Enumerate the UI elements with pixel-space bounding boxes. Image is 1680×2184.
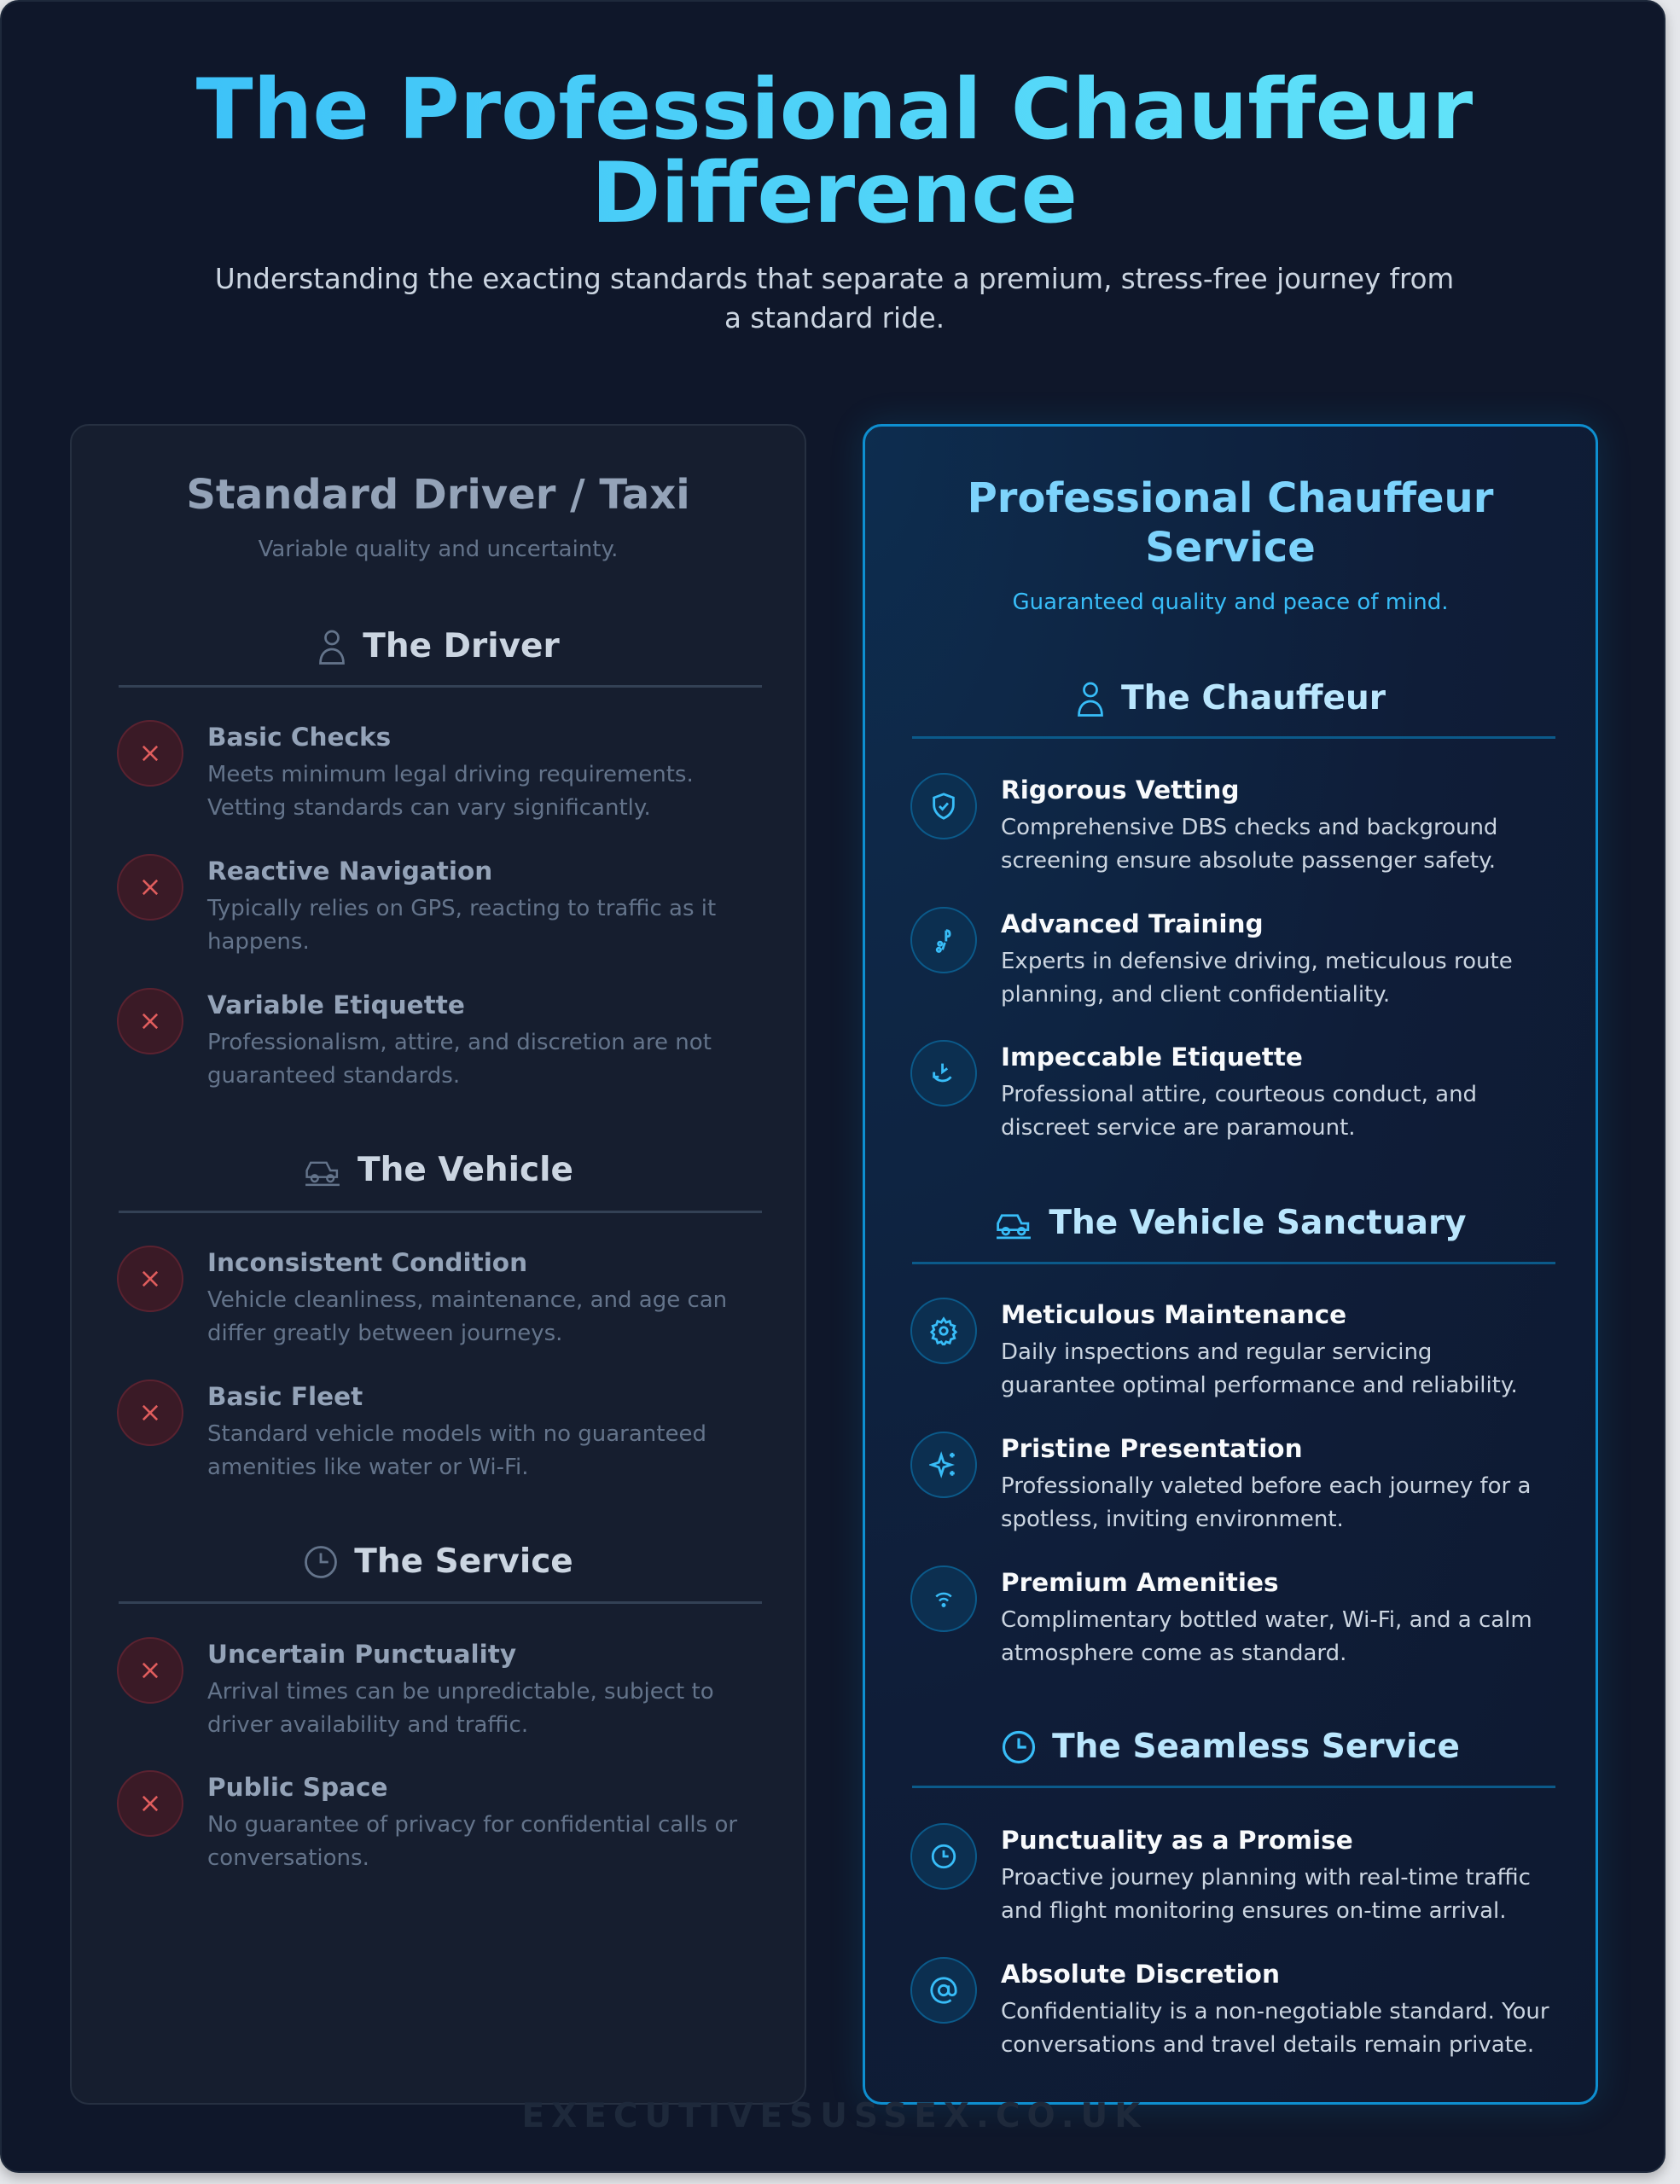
item: inconsistent condition: Inconsistent Condition (207, 1248, 527, 1277)
section heading: vehicle sanctuary: The Vehicle Sanctuary (1049, 1204, 1467, 1242)
subtitle: Understanding the exacting standards that separate a premium, stress-free journey from (215, 263, 1454, 295)
item: premium amenities: Complimentary bottled water, Wi-Fi, and a calm atmosphere come as standard. (1001, 1607, 1532, 1666)
item: pristine presentation: Professionally valeted before each journey for a spotless, inviting environment. (1001, 1473, 1531, 1532)
item: punctuality: Proactive journey planning with real-time traffic and flight monitoring ensures on-time arrival. (1001, 1865, 1531, 1924)
panel subheading: Variable quality and uncertainty. (259, 537, 618, 562)
item: reactive navigation: Typically relies on GPS, reacting to traffic as it happens. (207, 896, 716, 955)
panel subheading: Guaranteed quality and peace of mind. (1012, 590, 1449, 615)
item: premium amenities: Premium Amenities (1001, 1568, 1279, 1597)
item: reactive navigation: Reactive Navigation (207, 857, 492, 886)
item: advanced training (910, 907, 1513, 1008)
item: uncertain punctuality (117, 1637, 714, 1738)
item: basic fleet: Standard vehicle models with no guaranteed amenities like water or Wi-Fi. (207, 1421, 706, 1480)
section heading: driver: The Driver (363, 627, 560, 665)
item: premium amenities (910, 1565, 1532, 1666)
item: inconsistent condition (117, 1246, 727, 1346)
item: public space (117, 1770, 737, 1871)
item: impeccable etiquette (910, 1040, 1477, 1141)
item: advanced training: Experts in defensive driving, meticulous route planning, and client confidentiality. (1001, 949, 1513, 1008)
item: rigorous vetting: Comprehensive DBS checks and background screening ensure absolute passenger safety. (1001, 815, 1497, 874)
item: advanced training: Advanced Training (1001, 909, 1264, 938)
panel heading: Standard Driver / Taxi (186, 471, 690, 519)
item: absolute discretion (910, 1957, 1549, 2058)
section heading: service: The Service (354, 1542, 573, 1581)
item: variable etiquette: Professionalism, attire, and discretion are not guaranteed standards. (207, 1030, 712, 1089)
panel heading: Service (1145, 524, 1316, 572)
section heading: vehicle: The Vehicle (358, 1151, 573, 1189)
item: basic checks: Meets minimum legal driving requirements. Vetting standards can vary significantly. (207, 762, 694, 821)
item: basic checks (117, 720, 694, 821)
item: reactive navigation (117, 854, 716, 955)
section heading: chauffeur: The Chauffeur (1121, 679, 1386, 717)
item: basic fleet: Basic Fleet (207, 1382, 363, 1411)
item: basic checks: Basic Checks (207, 723, 391, 752)
item: variable etiquette (117, 988, 712, 1089)
watermark: EXECUTIVESUSSEX.CO.UK (522, 2097, 1147, 2135)
item: public space: No guarantee of privacy for confidential calls or conversations. (207, 1812, 737, 1871)
panel heading (968, 474, 1493, 572)
item: uncertain punctuality: Arrival times can be unpredictable, subject to driver availability and traffic. (207, 1679, 714, 1738)
panel: professional chauffeur (863, 424, 1598, 2105)
item: meticulous maintenance: Meticulous Maintenance (1001, 1300, 1346, 1329)
title: Difference (591, 145, 1078, 242)
item: punctuality: Punctuality as a Promise (1001, 1826, 1353, 1855)
item: pristine presentation: Pristine Presentation (1001, 1434, 1303, 1463)
panel heading: Professional Chauffeur (968, 474, 1493, 522)
subtitle: a standard ride. (724, 302, 945, 334)
item: absolute discretion: Confidentiality is a non-negotiable standard. Your conversations and travel details remain private. (1001, 1999, 1549, 2058)
item: impeccable etiquette: Impeccable Etiquette (1001, 1043, 1303, 1072)
item: meticulous maintenance (910, 1298, 1518, 1398)
item: variable etiquette: Variable Etiquette (207, 990, 465, 1019)
item: impeccable etiquette: Professional attire, courteous conduct, and discreet service are paramount. (1001, 1082, 1477, 1141)
title: The Professional Chauffeur (196, 61, 1473, 159)
title (2, 68, 1667, 235)
item: inconsistent condition: Vehicle cleanliness, maintenance, and age can differ greatly between journeys. (207, 1287, 727, 1346)
item: public space: Public Space (207, 1773, 387, 1802)
item: meticulous maintenance: Daily inspections and regular servicing guarantee optimal performance and reliability. (1001, 1339, 1518, 1398)
item: rigorous vetting: Rigorous Vetting (1001, 775, 1240, 804)
item: basic fleet (117, 1380, 706, 1480)
item: uncertain punctuality: Uncertain Punctuality (207, 1640, 516, 1669)
item: rigorous vetting (910, 773, 1497, 874)
subtitle (215, 263, 1454, 334)
item: punctuality (910, 1823, 1531, 1924)
item: absolute discretion: Absolute Discretion (1001, 1960, 1280, 1989)
panel: standard driver (70, 424, 806, 2105)
item: pristine presentation (910, 1432, 1531, 1532)
section heading: seamless service: The Seamless Service (1052, 1728, 1460, 1766)
